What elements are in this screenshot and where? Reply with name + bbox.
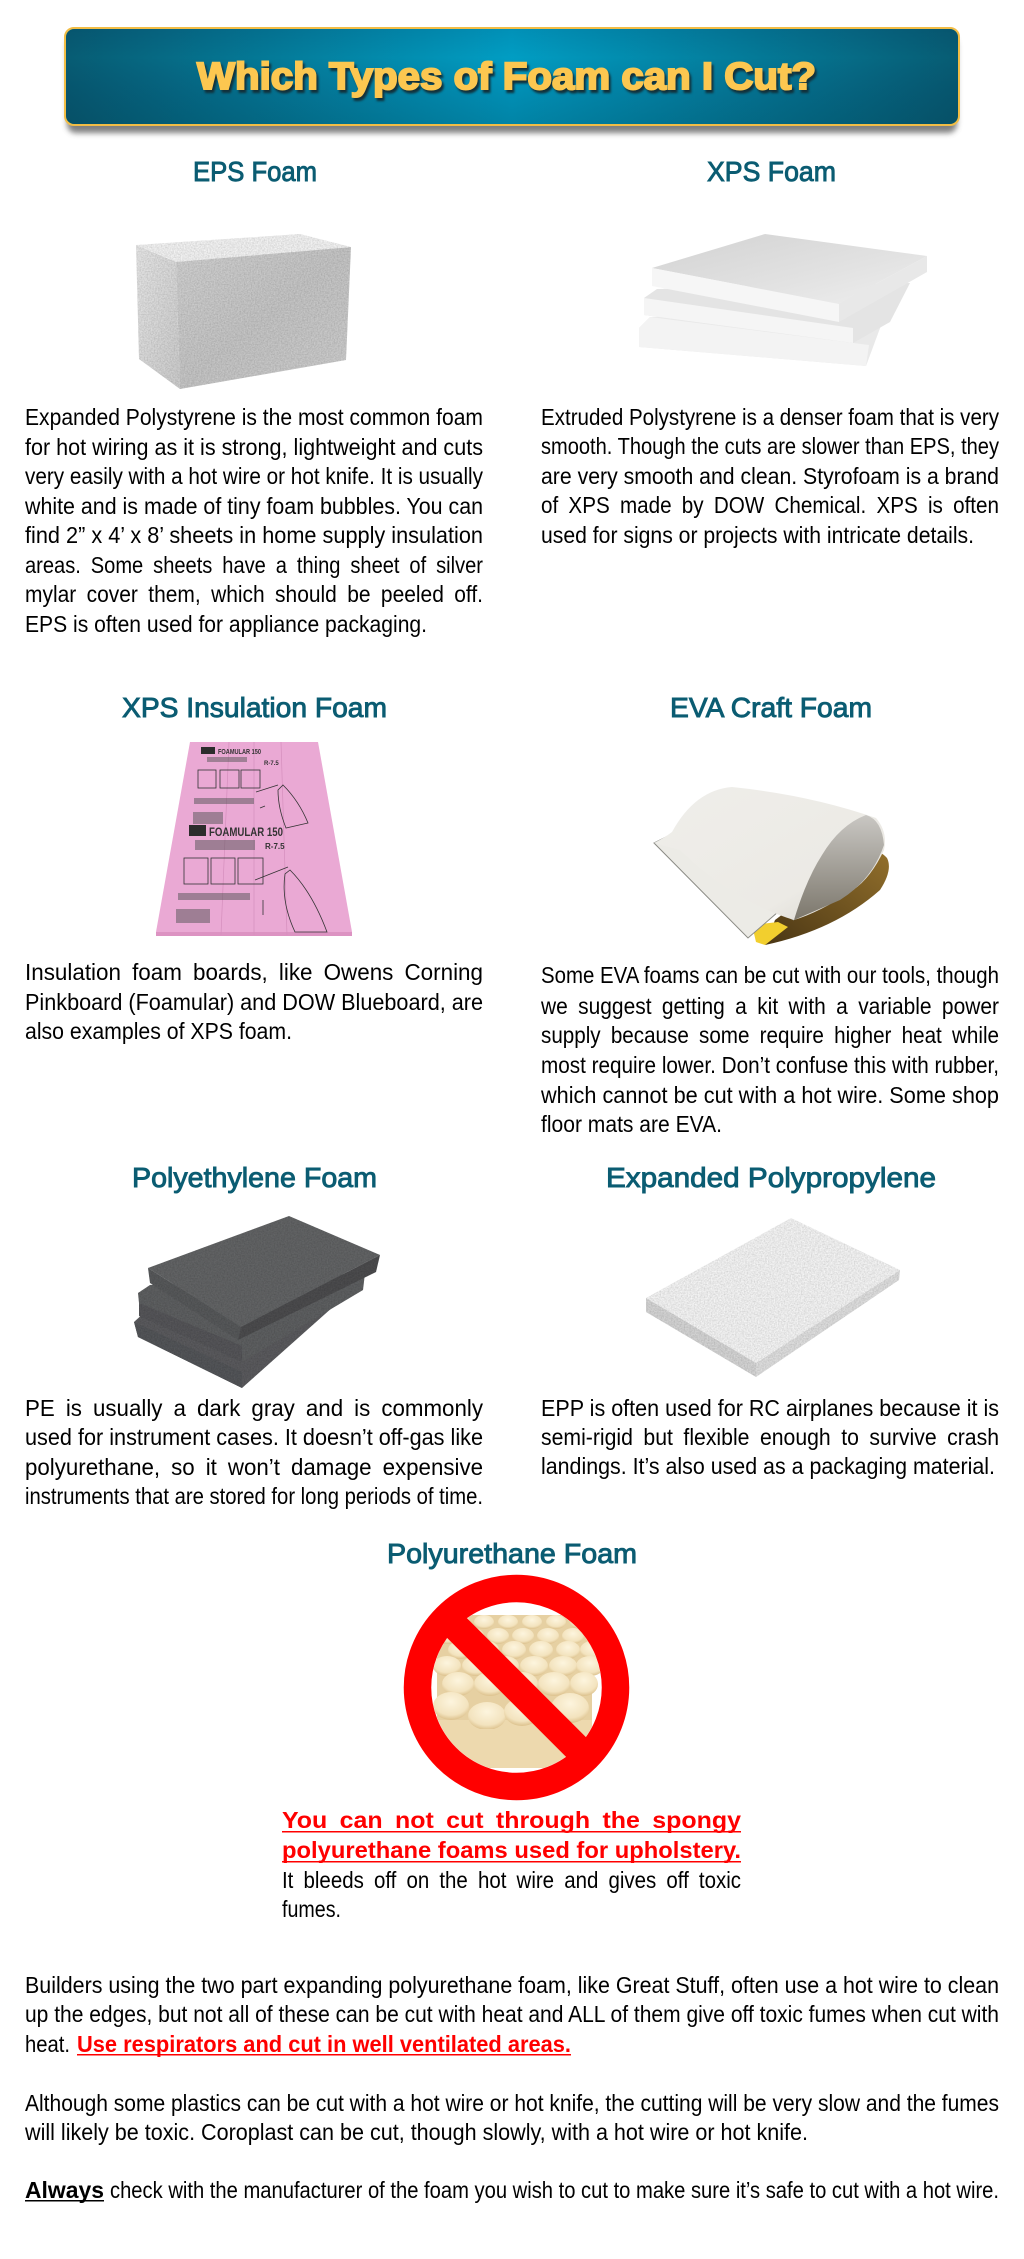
image: pink insulation board: R-7.5 <box>264 761 279 767</box>
panel: polyethylene foam <box>25 1162 483 1509</box>
image: pink insulation board: R-7.5 <box>265 842 285 851</box>
text: PE description: used for instrument cases. It doesn’t off-gas like <box>25 1424 483 1450</box>
heading: EPS Foam: EPS Foam <box>193 156 317 187</box>
text: EPS description: Expanded Polystyrene is the most common foam <box>25 404 483 430</box>
panel: EVA craft foam <box>540 692 999 1137</box>
image: XPS foam sheets <box>639 234 927 366</box>
warning text: fumes. <box>282 1896 341 1922</box>
heading: XPS Insulation Foam: XPS Insulation Foam <box>122 692 387 723</box>
text: EPS description: for hot wiring as it is strong, lightweight and cuts <box>25 434 483 460</box>
text: plastics note <box>24 2090 999 2145</box>
text: PE description: polyurethane, so it won’t damage expensive <box>25 1454 483 1480</box>
text: EPP description: semi-rigid but flexible enough to survive crash <box>541 1424 999 1450</box>
warning text <box>282 1807 741 1922</box>
heading: Polyurethane Foam: Polyurethane Foam <box>387 1538 637 1569</box>
text: XPS description: are very smooth and clean. Styrofoam is a brand <box>541 463 999 489</box>
panel: polyurethane foam <box>282 1538 741 1922</box>
warning text: It bleeds off on the hot wire and gives off toxic <box>282 1867 741 1893</box>
text: EPP description: landings. It’s also used as a packaging material. <box>541 1453 995 1479</box>
panel: XPS foam <box>541 156 999 548</box>
text: EVA description <box>540 962 999 1137</box>
image: dark gray PE foam sheets <box>134 1216 380 1388</box>
image: EPS foam block <box>136 234 351 389</box>
text: PE description: PE is usually a dark gray and is commonly <box>25 1395 483 1421</box>
text: insulation description: also examples of XPS foam. <box>25 1018 292 1044</box>
icon: prohibited polyurethane foam <box>418 1588 616 1786</box>
text: PE description: instruments that are stored for long periods of time. <box>25 1483 483 1509</box>
warning text: polyurethane foams used for upholstery. <box>282 1837 741 1863</box>
text: manufacturer note: Always <box>25 2177 104 2203</box>
heading: Expanded Polypropylene: Expanded Polypropylene <box>606 1162 936 1193</box>
text: EPS description: find 2” x 4’ x 8’ sheets in home supply insulation <box>25 522 483 548</box>
image: EVA foam sheet roll <box>654 787 889 945</box>
image: pink insulation board <box>156 742 352 936</box>
heading: Polyethylene Foam: Polyethylene Foam <box>132 1162 377 1193</box>
text: EPS description: areas. Some sheets have a thing sheet of silver <box>25 552 483 578</box>
text: EPS description: mylar cover them, which should be peeled off. <box>25 581 483 607</box>
image: pink insulation board: FOAMULAR 150 <box>218 749 261 756</box>
text: EVA description: floor mats are EVA. <box>541 1111 722 1137</box>
image: white EPP foam slab <box>646 1218 900 1377</box>
text: plastics note: will likely be toxic. Coroplast can be cut, though slowly, with a hot wire or hot knife. <box>24 2119 808 2145</box>
panel: expanded polypropylene <box>541 1162 999 1479</box>
text: EPP description: EPP is often used for RC airplanes because it is <box>541 1395 999 1421</box>
text: expanding foam notes: Use respirators and cut in well ventilated areas. <box>77 2031 571 2057</box>
text: EPS description: very easily with a hot wire or hot knife. It is usually <box>25 463 483 489</box>
text: insulation description: Insulation foam boards, like Owens Corning <box>25 959 483 985</box>
text: XPS description: used for signs or projects with intricate details. <box>541 522 974 548</box>
panel: EPS foam <box>24 156 483 637</box>
text: expanding foam notes: heat. <box>25 2031 70 2057</box>
text: EPS description: white and is made of tiny foam bubbles. You can <box>24 493 483 519</box>
text: insulation description <box>25 959 483 1044</box>
heading: EVA Craft Foam: EVA Craft Foam <box>670 692 872 723</box>
text: EPS description: EPS is often used for appliance packaging. <box>25 611 427 637</box>
panel: XPS insulation foam <box>25 692 483 1044</box>
text: EPP description <box>541 1395 999 1479</box>
text: insulation description: Pinkboard (Foamular) and DOW Blueboard, are <box>25 989 483 1015</box>
heading: XPS Foam: XPS Foam <box>707 156 836 187</box>
title: Which Types of Foam can I Cut? <box>197 56 816 98</box>
warning text: You can not cut through the spongy <box>282 1807 741 1833</box>
text: expanding foam notes <box>25 1972 999 2057</box>
text: EVA description: which cannot be cut with a hot wire. Some shop <box>540 1082 999 1108</box>
text: EPS description <box>24 404 483 637</box>
title banner <box>65 28 959 133</box>
text: XPS description <box>541 404 999 548</box>
text: PE description <box>25 1395 483 1509</box>
image: pink insulation board: FOAMULAR 150 <box>209 825 283 839</box>
